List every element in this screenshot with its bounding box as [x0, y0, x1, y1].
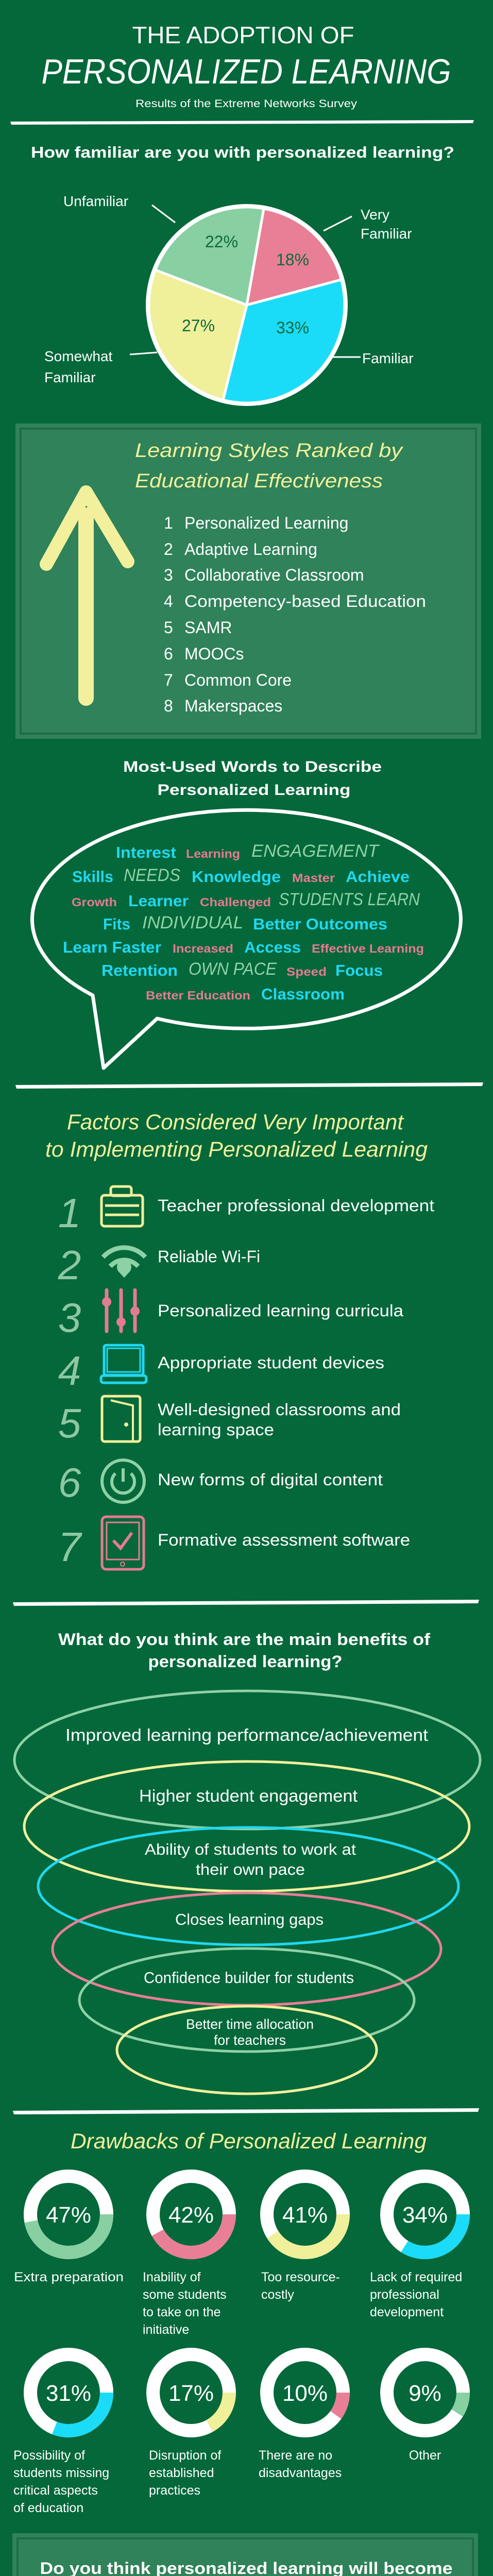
speech bubble: word cloud: Fits — [103, 915, 130, 933]
speech bubble: word cloud: Learn Faster — [63, 938, 161, 956]
donut charts: drawbacks: 34% — [402, 2202, 448, 2228]
speech bubble: word cloud: Better Education — [146, 989, 250, 1002]
drawback labels: Extra preparation — [14, 2270, 124, 2284]
ranked list: SAMR — [184, 618, 232, 637]
title: PERSONALIZED LEARNING — [41, 52, 451, 91]
drawback labels: There are no — [259, 2448, 332, 2463]
ranked list: 4 — [164, 592, 173, 611]
drawback labels: practices — [149, 2483, 200, 2498]
speech bubble: word cloud: ENGAGEMENT — [251, 841, 380, 861]
benefit labels: Closes learning gaps — [175, 1910, 324, 1928]
speech bubble: word cloud: Skills — [72, 868, 113, 886]
speech bubble: word cloud: Learner — [128, 892, 189, 910]
speech bubble: word cloud: Learning — [186, 847, 240, 860]
drawback labels: disadvantages — [259, 2466, 342, 2480]
drawback labels: to take on the — [143, 2305, 221, 2319]
speech bubble: word cloud: Focus — [335, 961, 383, 979]
factor 2: reliable wi-fi — [58, 1242, 260, 1288]
heading: factors considered very important: to Implementing Personalized Learning — [45, 1137, 428, 1161]
pie labels: Unfamiliar — [63, 193, 128, 209]
speech bubble: word cloud: STUDENTS LEARN — [279, 890, 420, 909]
ranked list: 5 — [164, 618, 173, 637]
heading: factors considered very important: Factors Considered Very Important — [67, 1110, 404, 1134]
factor 6: new forms of digital content: New forms of digital content — [158, 1470, 383, 1489]
speech bubble: word cloud: Retention — [101, 961, 178, 979]
pie chart: familiarity: 18% — [276, 250, 309, 269]
benefit labels: Confidence builder for students — [144, 1969, 354, 1987]
speech bubble: word cloud: INDIVIDUAL — [142, 913, 243, 933]
heading: most-used words — [123, 758, 382, 799]
speech bubble: word cloud: Achieve — [346, 868, 410, 886]
ranked list: Adaptive Learning — [184, 540, 317, 558]
panel: learning styles ranked — [15, 423, 481, 739]
benefit labels: Improved learning performance/achievement — [65, 1725, 428, 1744]
ranked list: 2 — [164, 540, 173, 558]
donut charts: drawbacks: 9% — [409, 2381, 441, 2406]
factor 2: reliable wi-fi: 2 — [58, 1242, 81, 1288]
heading: main benefits question: What do you think are the main benefits of — [58, 1630, 430, 1649]
pie labels — [44, 193, 414, 385]
benefits: concentric chalk ellipses — [14, 1691, 480, 2094]
drawback labels: costly — [261, 2287, 294, 2302]
factor 1: teacher professional development: Teacher professional development — [158, 1196, 434, 1215]
factor 7: formative assessment software: Formative assessment software — [158, 1531, 410, 1549]
ranked list: MOOCs — [184, 645, 244, 663]
donut charts: drawbacks: 47% — [46, 2202, 91, 2228]
factor 2: reliable wi-fi: Reliable Wi-Fi — [158, 1247, 260, 1266]
factor 3: personalized learning curricula — [58, 1290, 403, 1341]
donut charts: drawbacks — [30, 2176, 463, 2431]
drawback labels: Disruption of — [149, 2448, 221, 2463]
factor 5: well-designed classrooms: Well-designed classrooms and — [158, 1400, 401, 1419]
panel heading: Educational Effectiveness — [135, 470, 383, 492]
drawback labels: Inability of — [143, 2270, 201, 2284]
speech bubble: word cloud: Classroom — [261, 985, 345, 1003]
panel heading — [135, 440, 403, 492]
heading: factors considered very important — [45, 1110, 428, 1161]
pie labels: Familiar — [362, 350, 414, 366]
donut charts: drawbacks: 31% — [46, 2381, 91, 2406]
heading: main benefits question — [58, 1630, 430, 1671]
factor 3: personalized learning curricula: Personalized learning curricula — [158, 1301, 403, 1320]
drawback labels: established — [149, 2466, 214, 2480]
speech bubble: word cloud: Growth — [72, 895, 117, 909]
ranked list: Personalized Learning — [184, 514, 348, 532]
speech bubble: word cloud: Better Outcomes — [253, 915, 387, 933]
ranked list: Competency-based Education — [184, 592, 426, 611]
ranked list: 3 — [164, 566, 173, 584]
benefit labels: for teachers — [214, 2032, 286, 2048]
drawback labels: students missing — [13, 2466, 109, 2480]
factor 4: appropriate student devices: Appropriate student devices — [158, 1353, 384, 1372]
heading: main benefits question: personalized learning? — [148, 1652, 342, 1671]
factor 7: formative assessment software: 7 — [58, 1524, 82, 1570]
speech bubble: word cloud: Access — [244, 938, 301, 956]
ranked list — [164, 514, 426, 715]
speech bubble: word cloud: Master — [292, 871, 335, 885]
drawback labels: some students — [143, 2287, 227, 2302]
pie labels: Somewhat — [44, 348, 113, 364]
speech bubble: word cloud: Knowledge — [192, 868, 281, 886]
pie labels: Familiar — [44, 369, 96, 385]
drawback labels: professional — [370, 2287, 439, 2302]
drawback labels: Possibility of — [13, 2448, 85, 2463]
heading: familiarity question: How familiar are you with personalized learning? — [31, 143, 454, 161]
heading: most-used words: Personalized Learning — [158, 782, 350, 799]
factor 6: new forms of digital content — [58, 1460, 383, 1505]
speech bubble: word cloud: OWN PACE — [189, 959, 277, 979]
pie chart: familiarity: 22% — [205, 232, 238, 251]
factor 4: appropriate student devices: 4 — [58, 1348, 81, 1394]
speech bubble: word cloud: Speed — [286, 965, 327, 978]
panel heading: Learning Styles Ranked by — [135, 440, 403, 462]
drawback labels: Other — [409, 2448, 441, 2463]
factor 4: appropriate student devices — [58, 1345, 384, 1394]
donut charts: drawbacks: 41% — [282, 2202, 328, 2228]
factor 1: teacher professional development — [58, 1187, 434, 1236]
factor 1: teacher professional development: 1 — [58, 1190, 81, 1236]
drawback labels: development — [370, 2305, 444, 2319]
ranked list: 8 — [164, 697, 173, 715]
donut charts: drawbacks: 17% — [168, 2381, 214, 2406]
pie chart: familiarity: 27% — [182, 316, 215, 335]
ranked list: Makerspaces — [184, 697, 282, 715]
benefit labels: Better time allocation — [186, 2016, 314, 2032]
factor 7: formative assessment software — [58, 1517, 410, 1570]
benefit labels: Higher student engagement — [139, 1786, 358, 1805]
benefit labels: Ability of students to work at — [145, 1840, 356, 1858]
speech bubble: word cloud: NEEDS — [124, 866, 180, 885]
title — [41, 22, 451, 91]
heading: most-used words: Most-Used Words to Describe — [123, 758, 382, 775]
ranked list: 1 — [164, 514, 173, 532]
drawback labels: Too resource- — [261, 2270, 340, 2284]
factor 5: well-designed classrooms: 5 — [58, 1400, 81, 1446]
donut charts: drawbacks: 42% — [168, 2202, 214, 2228]
speech bubble: word cloud — [32, 810, 461, 1068]
speech bubble: word cloud: Interest — [116, 843, 176, 861]
drawback labels — [13, 2270, 462, 2515]
drawback labels: Lack of required — [370, 2270, 462, 2284]
pie chart: familiarity — [146, 204, 348, 406]
drawback labels: of education — [13, 2501, 83, 2515]
ranked list: 7 — [164, 671, 173, 689]
heading: drawbacks: Drawbacks of Personalized Learning — [71, 2129, 427, 2153]
ranked list: 6 — [164, 645, 173, 663]
factor 6: new forms of digital content: 6 — [58, 1460, 81, 1505]
ranked list: Common Core — [184, 671, 292, 689]
ranked list: Collaborative Classroom — [184, 566, 364, 584]
drawback labels: initiative — [143, 2323, 189, 2337]
factor 3: personalized learning curricula: 3 — [58, 1295, 81, 1341]
drawback labels: critical aspects — [13, 2483, 98, 2498]
factor 5: well-designed classrooms — [58, 1396, 401, 1446]
pie labels: Familiar — [361, 226, 412, 242]
speech bubble: word cloud: Challenged — [200, 895, 271, 909]
subtitle: Results of the Extreme Networks Survey — [135, 98, 358, 110]
benefit labels: their own pace — [196, 1860, 305, 1878]
factor 5: well-designed classrooms: learning space — [158, 1420, 274, 1439]
panel: relevance next 1-2 years — [12, 2533, 478, 2576]
factors list — [58, 1187, 434, 1570]
pie chart: familiarity: 33% — [276, 318, 309, 337]
speech bubble: word cloud: Increased — [173, 942, 233, 955]
pie labels: Very — [361, 207, 389, 223]
title: THE ADOPTION OF — [132, 22, 354, 48]
donut charts: drawbacks: 10% — [282, 2381, 328, 2406]
icon: chalk up arrow — [46, 492, 128, 698]
benefit labels — [65, 1725, 428, 2048]
speech bubble: word cloud: Effective Learning — [312, 942, 424, 955]
